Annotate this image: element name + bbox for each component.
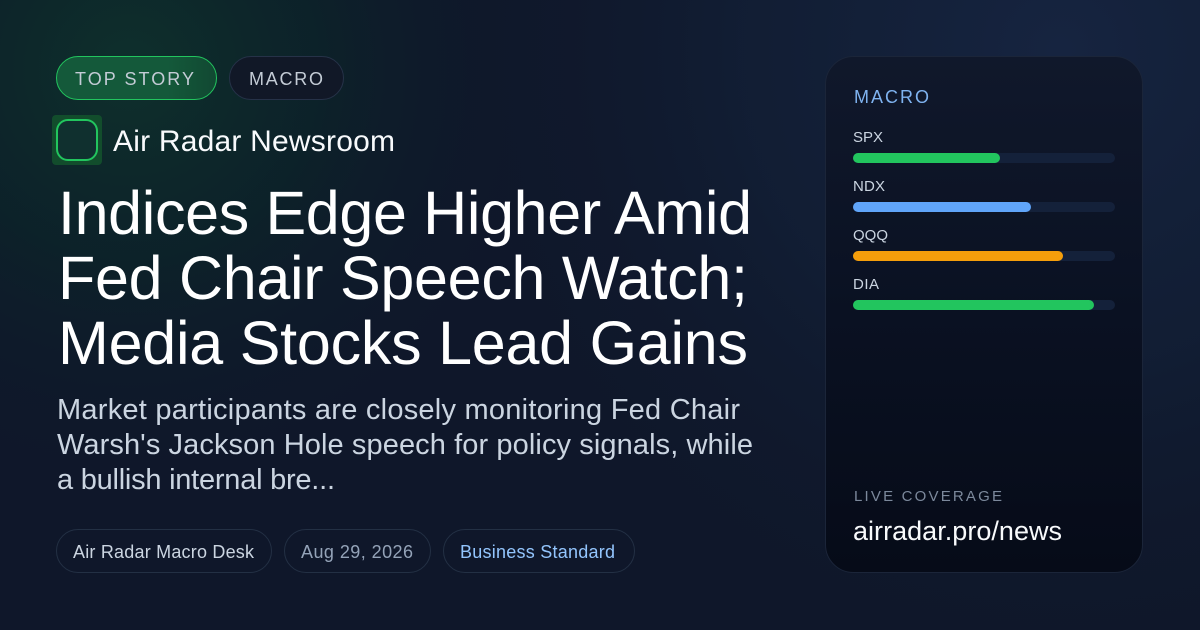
panel: macro sidebar bbox=[826, 56, 1142, 572]
bar: NDX: NDX bbox=[853, 178, 885, 195]
pill: macro: MACRO bbox=[249, 69, 323, 89]
chip: desk: Air Radar Macro Desk bbox=[73, 542, 255, 562]
headline: Fed Chair Speech Watch; bbox=[58, 244, 748, 312]
chip: date bbox=[284, 530, 430, 572]
description bbox=[57, 394, 753, 496]
headline bbox=[58, 179, 752, 377]
headline: Media Stocks Lead Gains bbox=[58, 309, 748, 377]
chip: source bbox=[444, 530, 634, 572]
brand: Air Radar Newsroom bbox=[52, 115, 395, 165]
chip: date: Aug 29, 2026 bbox=[301, 542, 413, 562]
bar: SPX bbox=[853, 129, 1115, 163]
pill: top story: TOP STORY bbox=[75, 69, 194, 89]
bar: DIA bbox=[853, 276, 1115, 310]
pill: top story bbox=[56, 56, 216, 100]
brand name: Air Radar Newsroom bbox=[113, 125, 395, 158]
pill: macro bbox=[230, 56, 344, 100]
bar: QQQ bbox=[853, 227, 1115, 261]
bar: DIA: DIA bbox=[853, 276, 879, 293]
description: Market participants are closely monitoring Fed Chair bbox=[57, 394, 740, 426]
chip: desk bbox=[56, 530, 272, 572]
description: a bullish internal bre... bbox=[57, 464, 335, 496]
url: airradar.pro/news bbox=[853, 516, 1062, 546]
panel heading: MACRO bbox=[854, 87, 929, 107]
headline: Indices Edge Higher Amid bbox=[58, 179, 752, 247]
bar: NDX bbox=[853, 178, 1115, 212]
description: Warsh's Jackson Hole speech for policy signals, while bbox=[57, 429, 753, 461]
icon: brand square bbox=[52, 115, 102, 165]
bar: SPX: SPX bbox=[853, 129, 883, 146]
live coverage label: LIVE COVERAGE bbox=[854, 488, 1002, 505]
bar: QQQ: QQQ bbox=[853, 227, 888, 244]
chip: source: Business Standard bbox=[460, 542, 615, 562]
